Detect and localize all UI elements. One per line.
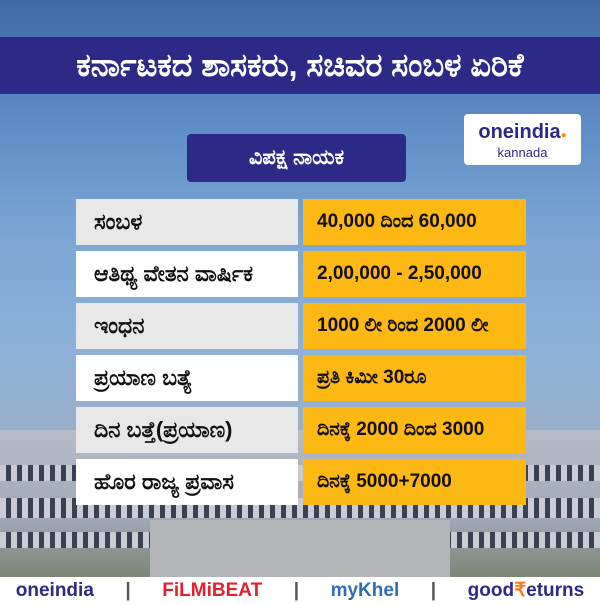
row 1: [76, 199, 526, 245]
footer logos: myKhel: [331, 580, 399, 600]
subheader: ವಿಪಕ್ಷ ನಾಯಕ: [249, 146, 344, 169]
table: ದಿನ ಬತ್ತೆ(ಪ್ರಯಾಣ): [94, 417, 233, 442]
table: 2,00,000 - 2,50,000: [317, 263, 482, 284]
logo: oneindia kannada: [464, 114, 581, 165]
table: ಹೊರ ರಾಜ್ಯ ಪ್ರವಾಸ: [94, 469, 234, 494]
building facade: [0, 430, 600, 577]
footer logos: oneindia: [16, 580, 94, 600]
table: ದಿನಕ್ಕೆ 5000+7000: [317, 471, 452, 492]
footer logos: |: [294, 580, 299, 600]
row 6: [76, 459, 526, 505]
footer logos: |: [125, 580, 131, 600]
table: ಇಂಧನ: [94, 313, 144, 338]
subheader: [187, 134, 406, 182]
row 2: [76, 251, 526, 297]
logo: oneindia kannada: kannada: [498, 145, 547, 160]
logo: oneindia kannada: oneindia●: [478, 121, 567, 143]
footer logos: |: [431, 580, 436, 600]
row 4: [76, 355, 526, 401]
row 5: [76, 407, 526, 453]
row 3: [76, 303, 526, 349]
table: ಪ್ರತಿ ಕಿಮೀ 30ರೂ: [317, 367, 426, 388]
footer logos: [0, 577, 600, 604]
table: ದಿನಕ್ಕೆ 2000 ದಿಂದ 3000: [317, 419, 484, 440]
footer logos: good₹eturns: [468, 580, 584, 601]
table: ಪ್ರಯಾಣ ಬತ್ಯೆ: [94, 365, 193, 390]
table: ಆತಿಥ್ಯ ವೇತನ ವಾರ್ಷಿಕ: [94, 261, 253, 286]
title bar: ಕರ್ನಾಟಕದ ಶಾಸಕರು, ಸಚಿವರ ಸಂಬಳ ಏರಿಕೆ: [76, 46, 524, 82]
footer logos: FiLMiBEAT: [162, 580, 262, 600]
table: 1000 ಲೀ ರಿಂದ 2000 ಲೀ: [317, 315, 489, 336]
title bar: [0, 37, 600, 94]
table: 40,000 ದಿಂದ 60,000: [317, 211, 477, 232]
table: ಸಂಬಳ: [94, 209, 142, 234]
